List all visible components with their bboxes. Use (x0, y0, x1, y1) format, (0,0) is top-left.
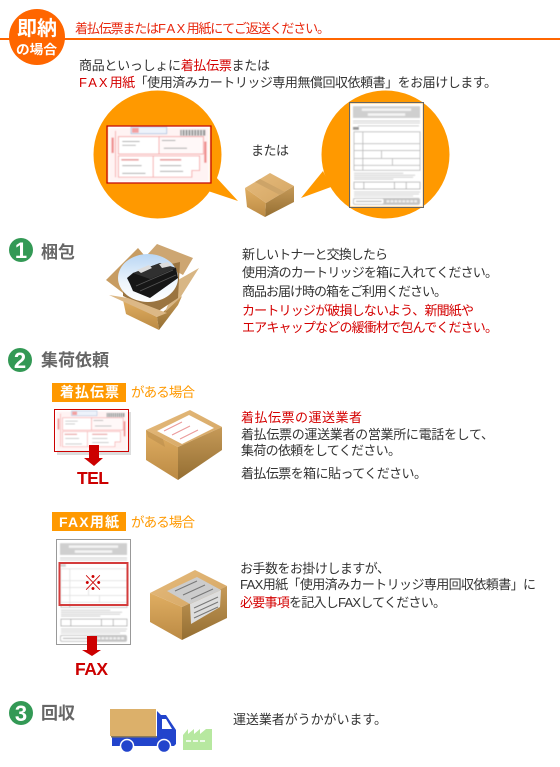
step 3 heading: 回収: 3 (15, 701, 27, 726)
slip thumbnail with TEL arrow: TEL (77, 468, 109, 488)
step 1 text: エアキャップなどの緩衝材で包んでください。 (242, 320, 498, 335)
tag: FAX用紙がある場合: FAX用紙 (59, 514, 119, 530)
text: 着払伝票の案内 (241, 410, 494, 481)
label: または: または (251, 143, 289, 158)
step 3 heading: 回収: 回収 (41, 704, 75, 723)
badge: 即納の場合: 即納 (17, 17, 57, 40)
badge: 即納の場合 (9, 9, 65, 65)
intro text: FAX用紙「使用済みカートリッジ専用無償回収依頼書」をお届けします。 (79, 75, 497, 90)
step 3 text: 運送業者がうかがいます。 (233, 712, 387, 727)
title: 着払伝票またはFAX用紙にてご返送ください。 (75, 21, 330, 36)
text: 着払伝票の案内: 着払伝票の運送業者の営業所に電話をして、 (241, 427, 494, 442)
header rule (0, 38, 560, 40)
step 1 heading: 梱包: 1 (15, 238, 27, 263)
step 1 text (242, 247, 498, 335)
step 1 text: 使用済のカートリッジを箱に入れてください。 (242, 265, 498, 280)
badge: 即納の場合: の場合 (16, 42, 57, 57)
icon: truck and factory (110, 709, 212, 752)
form thumbnail with FAX arrow: FAX (75, 659, 108, 679)
form thumbnail with FAX arrow (56, 540, 130, 679)
tag: FAX用紙がある場合 (52, 512, 196, 531)
tag: 着払伝票がある場合: がある場合 (131, 385, 196, 400)
step 1 text: 商品お届け時の箱をご利用ください。 (242, 284, 447, 299)
text: FAX用紙の案内: お手数をお掛けしますが、 (240, 561, 390, 576)
step 2 heading: 集荷依頼: 2 (14, 348, 26, 373)
icon: box with form attached (150, 570, 227, 640)
form thumbnail with FAX arrow: ※ (83, 573, 103, 595)
step 2 heading: 集荷依頼: 集荷依頼 (41, 351, 109, 370)
intro text: 商品といっしょに着払伝票または (79, 58, 270, 73)
slip thumbnail with TEL arrow (54, 410, 131, 488)
step 1 heading: 梱包 (9, 238, 75, 263)
text: FAX用紙の案内 (240, 561, 536, 610)
bubble: FAX用紙 (301, 90, 450, 218)
step 1 text: カートリッジが破損しないよう、新聞紙や (242, 303, 474, 318)
step 1 heading: 梱包: 梱包 (41, 242, 75, 262)
text: 着払伝票の案内: 着払伝票の運送業者 (241, 410, 362, 425)
step 1 text: 新しいトナーと交換したら (242, 247, 388, 262)
tag: FAX用紙がある場合: がある場合 (131, 515, 196, 530)
text: FAX用紙の案内: 必要事項を記入しFAXしてください。 (240, 595, 446, 610)
step 3 heading: 回収 (9, 701, 75, 726)
intro text (79, 58, 497, 90)
step 2 heading: 集荷依頼 (8, 348, 109, 373)
text: FAX用紙の案内: FAX用紙「使用済みカートリッジ専用回収依頼書」に (240, 577, 536, 592)
icon: box with slip attached (146, 410, 222, 480)
bubble: 着払伝票 (94, 90, 238, 218)
tag: 着払伝票がある場合: 着払伝票 (60, 384, 119, 400)
text: 着払伝票の案内: 着払伝票を箱に貼ってください。 (241, 466, 427, 481)
text: 着払伝票の案内: 集荷の依頼をしてください。 (241, 443, 401, 458)
tag: 着払伝票がある場合 (52, 383, 196, 402)
illustration: toner in open box (106, 244, 199, 330)
icon: cardboard box (245, 173, 294, 217)
